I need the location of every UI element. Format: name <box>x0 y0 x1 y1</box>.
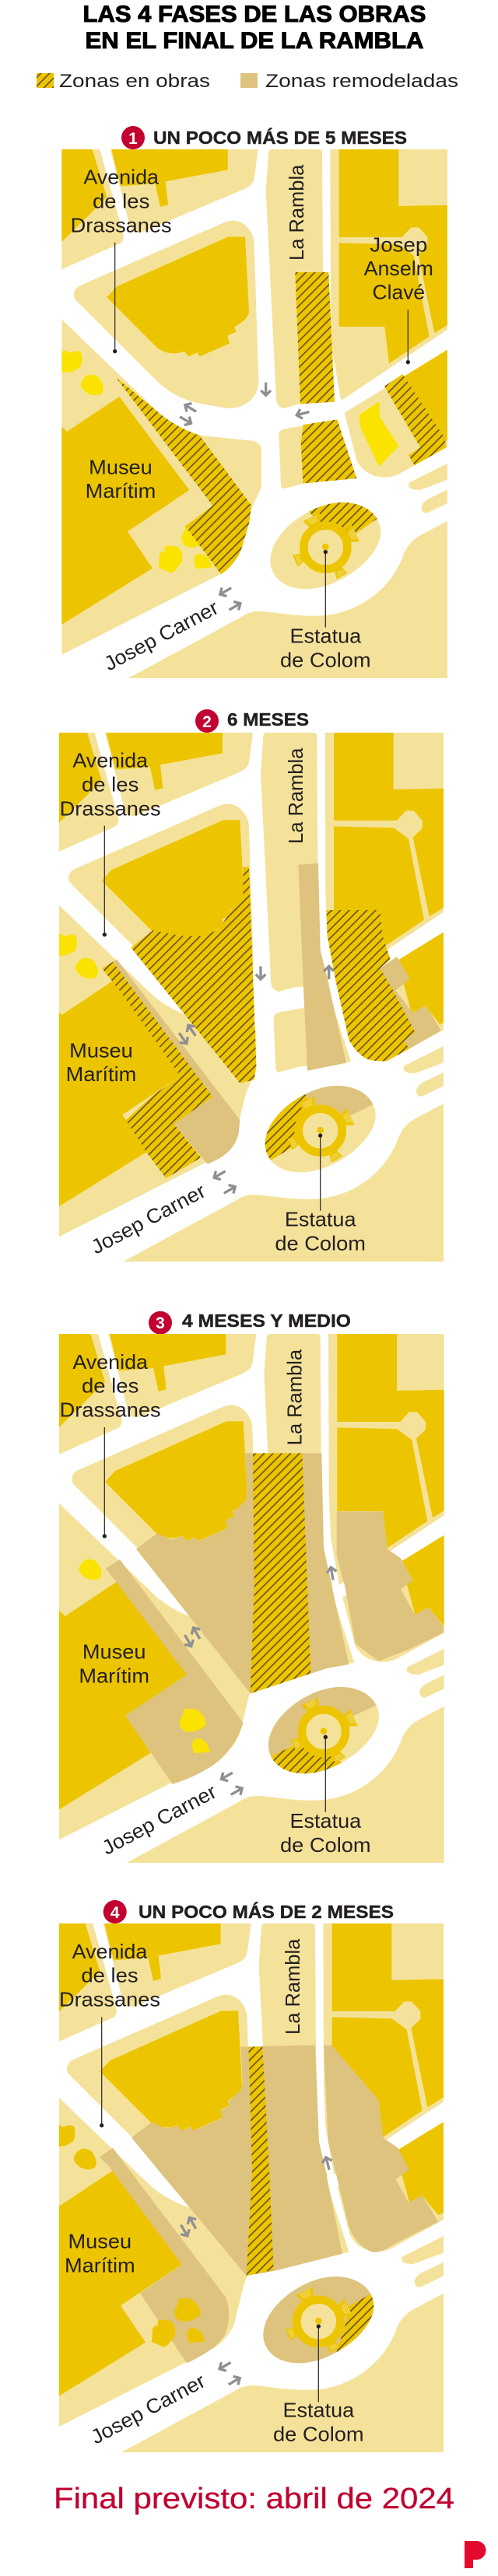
label: Museu Marítim <box>66 1038 136 1086</box>
label: Museu Marítim: Museu <box>69 1038 133 1062</box>
map: fase 3 <box>45 1334 460 1869</box>
label: Josep Anselm Clavé: Anselm <box>364 257 433 280</box>
logo <box>465 2541 486 2568</box>
label: Museu Marítim <box>79 1640 149 1687</box>
label: Avenida de les Drassanes: Avenida <box>83 166 160 189</box>
label: Museu Marítim: Museu <box>68 2230 132 2253</box>
label: Josep Anselm Clavé: Clavé <box>372 281 425 304</box>
label: Josep Carner: Josep Carner <box>98 1780 220 1860</box>
legend label: zonas en obras: Zonas en obras <box>59 71 210 92</box>
label: Estatua de Colom: Estatua <box>285 1208 356 1231</box>
roundabout zones <box>265 1086 374 1160</box>
remodelled zones <box>100 2045 438 2363</box>
label: Museu Marítim: Marítim <box>86 479 156 502</box>
label: La Rambla: La Rambla <box>284 747 307 844</box>
label: Estatua de Colom: Estatua <box>289 1809 362 1832</box>
works zones <box>102 867 415 1178</box>
trees <box>79 1559 210 1754</box>
label: Avenida de les Drassanes: Drassanes <box>60 1398 161 1422</box>
label: Museu Marítim: Museu <box>82 1640 146 1664</box>
remodelled zones <box>113 863 441 1164</box>
legend swatch: zonas en obras <box>37 73 54 88</box>
traffic arrows <box>181 1566 338 1799</box>
label: Museu Marítim: Museu <box>89 455 153 478</box>
label: Estatua de Colom <box>280 1735 371 1857</box>
label: Estatua de Colom: de Colom <box>275 1232 366 1255</box>
roundabout zones <box>263 2277 374 2363</box>
heading: fase 4: 4 <box>110 1904 120 1922</box>
label: Avenida de les Drassanes: Avenida <box>72 1940 148 1963</box>
label: Museu Marítim: Marítim <box>65 2253 135 2277</box>
traffic arrows <box>177 2156 334 2389</box>
heading: fase 2: 2 <box>202 713 212 731</box>
traffic arrows <box>177 383 310 614</box>
label: Josep Carner: Josep Carner <box>87 2369 209 2448</box>
label: Josep Anselm Clavé <box>364 233 433 364</box>
remodelled zones <box>106 1453 444 1784</box>
heading: fase 4: UN POCO MÁS DE 2 MESES <box>139 1901 394 1922</box>
label: Avenida de les Drassanes: de les <box>81 1964 139 1987</box>
traffic arrows <box>175 966 334 1198</box>
heading: fase 3: 3 <box>156 1314 165 1332</box>
monument ring <box>293 513 359 579</box>
trees <box>59 933 98 978</box>
title: LAS 4 FASES DE LAS OBRAS <box>82 2 426 27</box>
heading: fase 1: 1 <box>128 130 138 148</box>
label: Estatua de Colom: Estatua <box>289 625 362 648</box>
monument ring <box>291 1698 358 1763</box>
label: Avenida de les Drassanes: de les <box>82 1374 139 1398</box>
works zone <box>251 1453 310 1693</box>
heading: fase 3 <box>149 1311 351 1335</box>
label: Estatua de Colom <box>280 550 371 672</box>
label: Avenida de les Drassanes: Avenida <box>72 1350 149 1374</box>
title <box>82 2 426 54</box>
works zone <box>247 2047 274 2276</box>
label: Avenida de les Drassanes: de les <box>82 772 139 796</box>
label: Avenida de les Drassanes: Drassanes <box>71 213 172 236</box>
label: Museu Marítim <box>65 2230 135 2277</box>
label: Avenida de les Drassanes <box>71 166 172 353</box>
label: Estatua de Colom: de Colom <box>280 1833 371 1857</box>
works zones <box>116 272 446 574</box>
heading: fase 2 <box>195 709 309 733</box>
label: Museu Marítim: Marítim <box>79 1664 149 1687</box>
legend label: zonas remodeladas: Zonas remodeladas <box>265 71 458 92</box>
monument ring <box>287 1097 354 1163</box>
roundabout zones <box>268 1687 377 1773</box>
label: Estatua de Colom: de Colom <box>273 2423 364 2446</box>
trees <box>47 2125 205 2347</box>
label: La Rambla: La Rambla <box>281 1938 304 2035</box>
label: Museu Marítim <box>86 455 156 502</box>
label: Avenida de les Drassanes <box>60 749 161 936</box>
title: EN EL FINAL DE LA RAMBLA <box>86 28 423 54</box>
label: Avenida de les Drassanes: de les <box>93 189 149 212</box>
labels: fase 1 <box>71 164 433 675</box>
heading: fase 3: 4 MESES Y MEDIO <box>182 1311 351 1331</box>
label: La Rambla: La Rambla <box>282 1349 306 1445</box>
footer: final date: Final previsto: abril de 2024 <box>54 2483 454 2515</box>
heading: fase 1: UN POCO MÁS DE 5 MESES <box>153 127 407 148</box>
map: fase 4 <box>40 1923 454 2459</box>
heading: fase 2: 6 MESES <box>227 709 309 730</box>
label: Museu Marítim: Marítim <box>66 1062 136 1086</box>
labels: fase 4 <box>59 1938 364 2448</box>
label: Estatua de Colom: Estatua <box>282 2399 355 2422</box>
map: fase 2 <box>41 733 457 1268</box>
label: Estatua de Colom <box>275 1133 366 1255</box>
labels: fase 3 <box>60 1349 371 1860</box>
label: Josep Carner: Josep Carner <box>100 596 223 675</box>
label: Josep Anselm Clavé: Josep <box>370 233 427 256</box>
label: Avenida de les Drassanes <box>60 1350 161 1538</box>
trees <box>54 351 399 573</box>
map: fase 1 <box>47 149 461 684</box>
label: Josep Carner: Josep Carner <box>87 1179 209 1258</box>
label: Avenida de les Drassanes: Avenida <box>72 749 149 772</box>
label: Avenida de les Drassanes <box>59 1940 160 2127</box>
labels: fase 2 <box>60 747 366 1258</box>
label: Avenida de les Drassanes: Drassanes <box>59 1987 160 2011</box>
monument ring <box>286 2287 352 2354</box>
label: La Rambla: La Rambla <box>285 164 308 261</box>
legend <box>37 71 458 92</box>
legend swatch: zonas remodeladas <box>240 73 258 88</box>
label: Avenida de les Drassanes: Drassanes <box>60 796 161 820</box>
label: Estatua de Colom: de Colom <box>280 649 371 672</box>
label: Estatua de Colom <box>273 2324 364 2446</box>
